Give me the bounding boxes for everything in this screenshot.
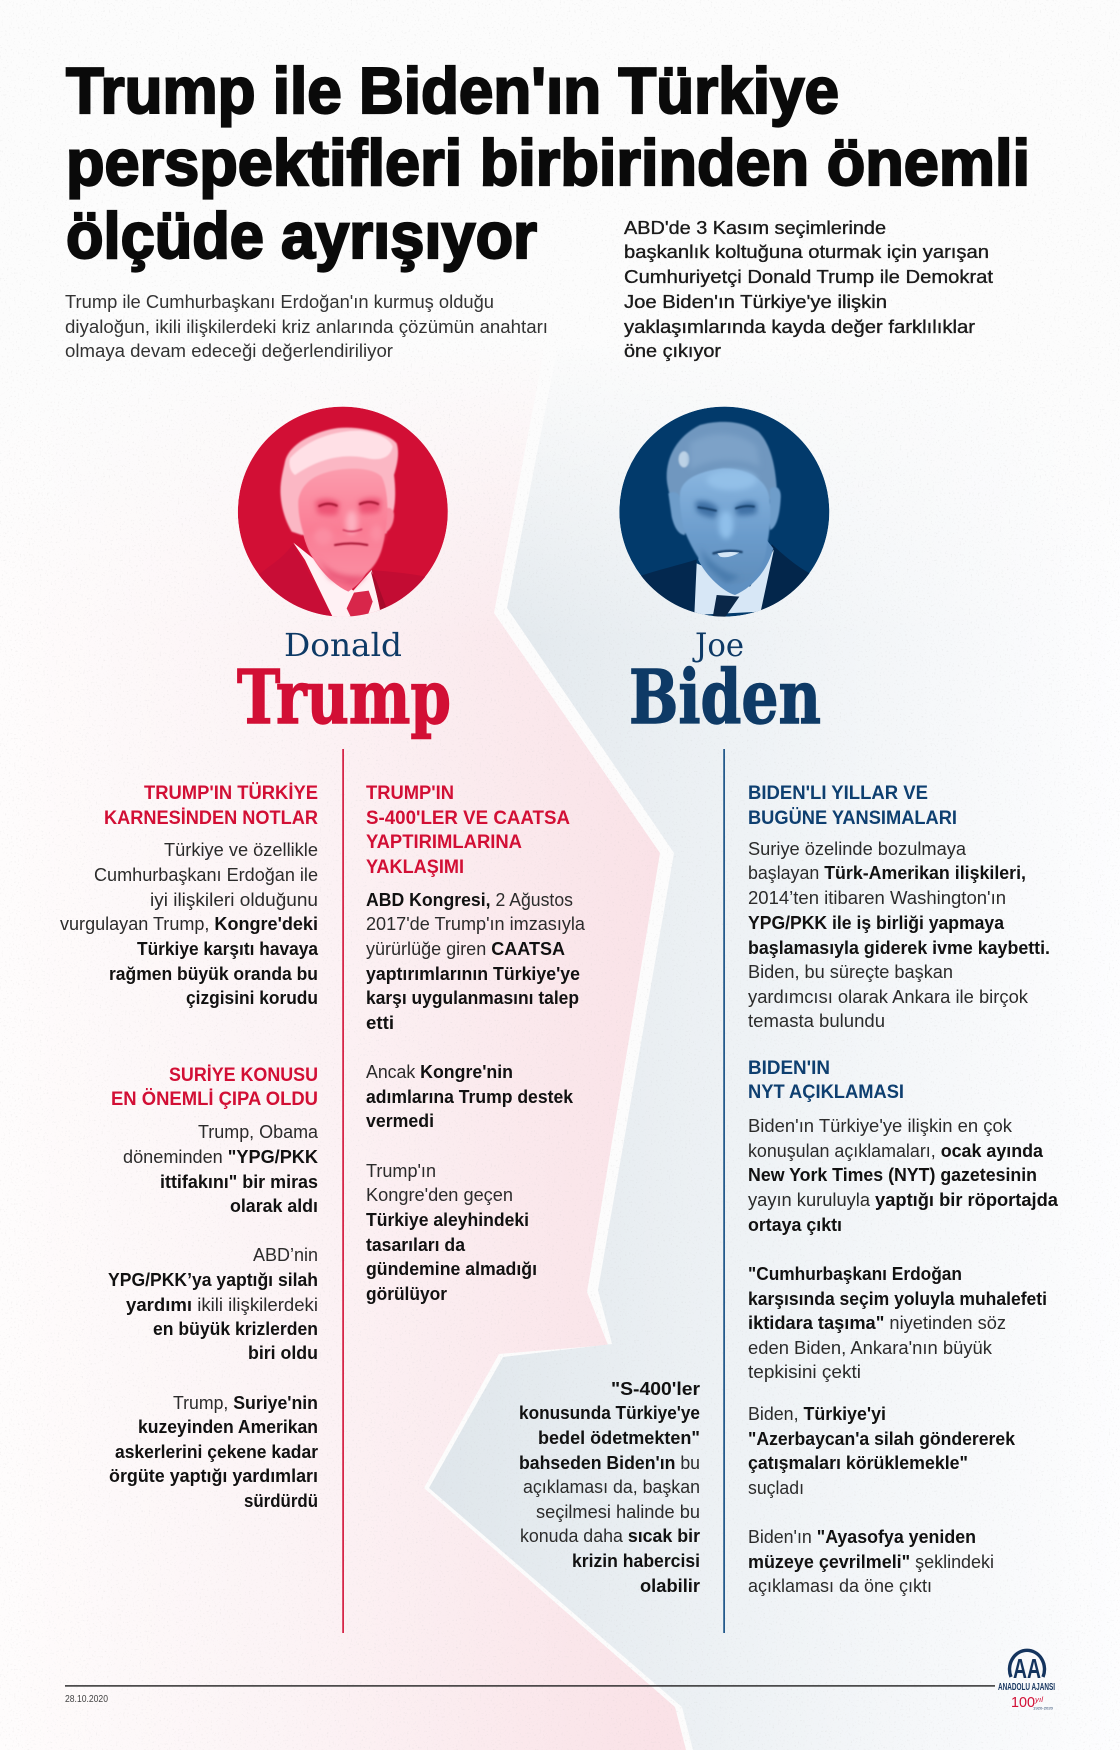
text: NYT: karşısında seçim yoluyla muhalefeti [748, 1289, 1047, 1309]
heading: Biden'li yillar [748, 783, 957, 829]
text: NYT: Biden'ın Türkiye'ye ilişkin en çok [748, 1116, 1013, 1136]
logo: Anadolu Ajansi: ANADOLU AJANSI [998, 1681, 1055, 1693]
portrait: Biden [619, 407, 829, 622]
intro text [624, 218, 993, 361]
callout: S-400 remarks: konusunda Türkiye'ye [519, 1403, 700, 1423]
callout: S-400 remarks: bahseden Biden'ın bu [519, 1453, 700, 1473]
text: karne: rağmen büyük oranda bu [109, 964, 318, 984]
text: NYT: çatışmaları körüklemekle" [748, 1453, 968, 1473]
text: S-400: Trump'ın [366, 1161, 436, 1181]
heading: Suriye: SURİYE KONUSU [169, 1065, 318, 1086]
text: karne: Cumhurbaşkanı Erdoğan ile [94, 865, 318, 885]
text: NYT: Biden'ın "Ayasofya yeniden [748, 1527, 976, 1547]
text: S-400: gündemine almadığı [366, 1259, 537, 1279]
heading: NYT: BIDEN'IN [748, 1058, 830, 1079]
text: Biden'li yillar: yardımcısı olarak Ankara ile birçok [748, 987, 1029, 1007]
text: Biden'li yillar: 2014’ten itibaren Washington'ın [748, 888, 1006, 908]
text: S-400: Türkiye aleyhindeki [366, 1210, 529, 1230]
callout: S-400 remarks: seçilmesi halinde bu [536, 1502, 700, 1522]
heading: S-400: TRUMP'IN [366, 783, 454, 804]
callout: S-400 remarks [519, 1379, 700, 1596]
text: Suriye: olarak aldı [230, 1196, 318, 1216]
logo: Anadolu Ajansi: yıl [1034, 1697, 1044, 1704]
text: Biden'li yillar: başlamasıyla giderek ivme kaybetti. [748, 938, 1050, 958]
footer rule [65, 1685, 995, 1687]
text: Suriye: ABD’nin [253, 1245, 318, 1265]
heading: karne: KARNESİNDEN NOTLAR [104, 808, 318, 829]
intro text: yaklaşımlarında kayda değer farklılıklar [624, 317, 975, 337]
intro text: başkanlık koltuğuna oturmak için yarışan [624, 242, 989, 262]
callout: S-400 remarks: "S-400'ler [611, 1379, 700, 1399]
text: karne: Türkiye karşıtı havaya [137, 939, 319, 959]
text: NYT: açıklaması da öne çıktı [748, 1576, 932, 1596]
divider: Trump [342, 749, 344, 1633]
logo: Anadolu Ajansi: 100 [1011, 1694, 1035, 1711]
text: karne: çizgisini korudu [186, 988, 318, 1008]
text: S-400: adımlarına Trump destek [366, 1087, 574, 1107]
heading: NYT [748, 1058, 904, 1103]
text: Suriye: askerlerini çekene kadar [115, 1442, 318, 1462]
text: NYT: "Azerbaycan'a silah göndererek [748, 1429, 1016, 1449]
title: ölçüde ayrışıyor [66, 199, 537, 272]
text: Suriye: döneminden "YPG/PKK [123, 1147, 318, 1167]
text: Suriye: ittifakını" bir miras [160, 1172, 318, 1192]
heading: karne: TRUMP'IN TÜRKİYE [144, 783, 318, 804]
text: S-400: karşı uygulanmasını talep [366, 988, 579, 1008]
name: Donald Trump: Trump [237, 655, 451, 741]
callout: S-400 remarks: krizin habercisi [572, 1551, 700, 1571]
heading: S-400: YAPTIRIMLARINA [366, 832, 522, 853]
text: S-400: vermedi [366, 1111, 434, 1131]
subtitle [65, 292, 548, 361]
heading: Biden'li yillar: BIDEN'LI YILLAR VE [748, 783, 928, 804]
text: Biden'li yillar [748, 839, 1050, 1031]
text: Biden'li yillar: başlayan Türk-Amerikan ilişkileri, [748, 863, 1026, 883]
heading: S-400: YAKLAŞIMI [366, 857, 464, 878]
text: NYT: suçladı [748, 1478, 804, 1498]
text: S-400: yaptırımlarının Türkiye'ye [366, 964, 580, 984]
heading: Suriye [111, 1065, 318, 1110]
date: 28.10.2020 [65, 1694, 108, 1705]
panel: Trump middle column [366, 783, 586, 1304]
text: NYT: müzeye çevrilmeli" şeklindeki [748, 1552, 994, 1572]
portrait: Trump [238, 407, 448, 622]
logo: Anadolu Ajansi [998, 1650, 1055, 1711]
heading: Biden'li yillar: BUGÜNE YANSIMALARI [748, 808, 957, 829]
text: Suriye: örgüte yaptığı yardımları [109, 1466, 318, 1486]
text: NYT: eden Biden, Ankara'nın büyük [748, 1338, 993, 1358]
subtitle: Trump ile Cumhurbaşkanı Erdoğan'ın kurmuş olduğu [65, 292, 494, 312]
callout: S-400 remarks: olabilir [640, 1576, 700, 1596]
text: S-400 [366, 890, 586, 1304]
text: NYT: ortaya çıktı [748, 1215, 842, 1235]
text: S-400: 2017'de Trump'ın imzasıyla [366, 914, 586, 934]
text: NYT: "Cumhurbaşkanı Erdoğan [748, 1264, 962, 1284]
heading: NYT: NYT AÇIKLAMASI [748, 1082, 904, 1103]
text: Suriye: biri oldu [248, 1343, 318, 1363]
title: perspektifleri birbirinden önemli [66, 126, 1030, 199]
text: karne [60, 840, 319, 1008]
name: Donald Trump: Donald [284, 626, 402, 664]
text: Suriye: Trump, Obama [198, 1122, 319, 1142]
logo: Anadolu Ajansi: AA [1013, 1653, 1041, 1684]
text: Suriye: Trump, Suriye'nin [173, 1393, 318, 1413]
text: NYT: iktidara taşıma" niyetinden söz [748, 1313, 1006, 1333]
text: Suriye: en büyük krizlerden [153, 1319, 318, 1339]
title: Trump ile Biden'ın Türkiye [66, 54, 839, 127]
name: Joe Biden [629, 626, 821, 741]
intro text: Cumhuriyetçi Donald Trump ile Demokrat [624, 267, 993, 287]
text: Suriye: yardımı ikili ilişkilerdeki [126, 1295, 318, 1315]
text: Biden'li yillar: Biden, bu süreçte başkan [748, 962, 953, 982]
callout: S-400 remarks: konuda daha sıcak bir [520, 1526, 700, 1546]
text: Suriye [108, 1122, 319, 1511]
panel: Trump left column [60, 783, 319, 1511]
text: S-400: Ancak Kongre'nin [366, 1062, 513, 1082]
text: karne: iyi ilişkileri olduğunu [150, 890, 318, 910]
text: S-400: tasarıları da [366, 1235, 466, 1255]
text: NYT: New York Times (NYT) gazetesinin [748, 1165, 1037, 1185]
text: Biden'li yillar: temasta bulundu [748, 1011, 885, 1031]
heading: S-400: S-400'LER VE CAATSA [366, 808, 570, 829]
name: Joe Biden: Biden [629, 655, 821, 741]
text: karne: vurgulayan Trump, Kongre'deki [60, 914, 318, 934]
text: S-400: etti [366, 1013, 394, 1033]
name: Donald Trump [237, 626, 451, 741]
panel: Biden column [748, 783, 1059, 1596]
subtitle: diyaloğun, ikili ilişkilerdeki kriz anlarında çözümün anahtarı [65, 317, 548, 337]
title [66, 54, 1030, 272]
intro text: ABD'de 3 Kasım seçimlerinde [624, 218, 886, 238]
heading: karne [104, 783, 318, 829]
text: NYT: Biden, Türkiye'yi [748, 1404, 886, 1424]
subtitle: olmaya devam edeceği değerlendiriliyor [65, 341, 393, 361]
text: NYT [748, 1116, 1059, 1596]
text: S-400: görülüyor [366, 1284, 447, 1304]
callout: S-400 remarks: açıklaması da, başkan [523, 1477, 700, 1497]
text: Suriye: kuzeyinden Amerikan [138, 1417, 318, 1437]
text: NYT: konuşulan açıklamaları, ocak ayında [748, 1141, 1044, 1161]
name: Joe Biden: Joe [692, 626, 744, 664]
logo: Anadolu Ajansi: 1920-2020 [1033, 1706, 1054, 1710]
heading: S-400 [366, 783, 570, 878]
intro text: öne çıkıyor [624, 341, 721, 361]
callout: S-400 remarks: bedel ödetmekten" [538, 1428, 700, 1448]
heading: Suriye: EN ÖNEMLİ ÇIPA OLDU [111, 1089, 318, 1110]
text: S-400: Kongre'den geçen [366, 1185, 513, 1205]
text: karne: Türkiye ve özellikle [164, 840, 318, 860]
text: Suriye: YPG/PKK’ya yaptığı silah [108, 1270, 318, 1290]
text: S-400: ABD Kongresi, 2 Ağustos [366, 890, 573, 910]
text: Biden'li yillar: Suriye özelinde bozulmaya [748, 839, 967, 859]
text: NYT: tepkisini çekti [748, 1362, 861, 1382]
divider: Biden [723, 749, 725, 1633]
text: NYT: yayın kuruluyla yaptığı bir röportajda [748, 1190, 1059, 1210]
text: Biden'li yillar: YPG/PKK ile iş birliği yapmaya [748, 913, 1005, 933]
text: Suriye: sürdürdü [244, 1491, 318, 1511]
text: S-400: yürürlüğe giren CAATSA [366, 939, 565, 959]
intro text: Joe Biden'ın Türkiye'ye ilişkin [624, 292, 887, 312]
